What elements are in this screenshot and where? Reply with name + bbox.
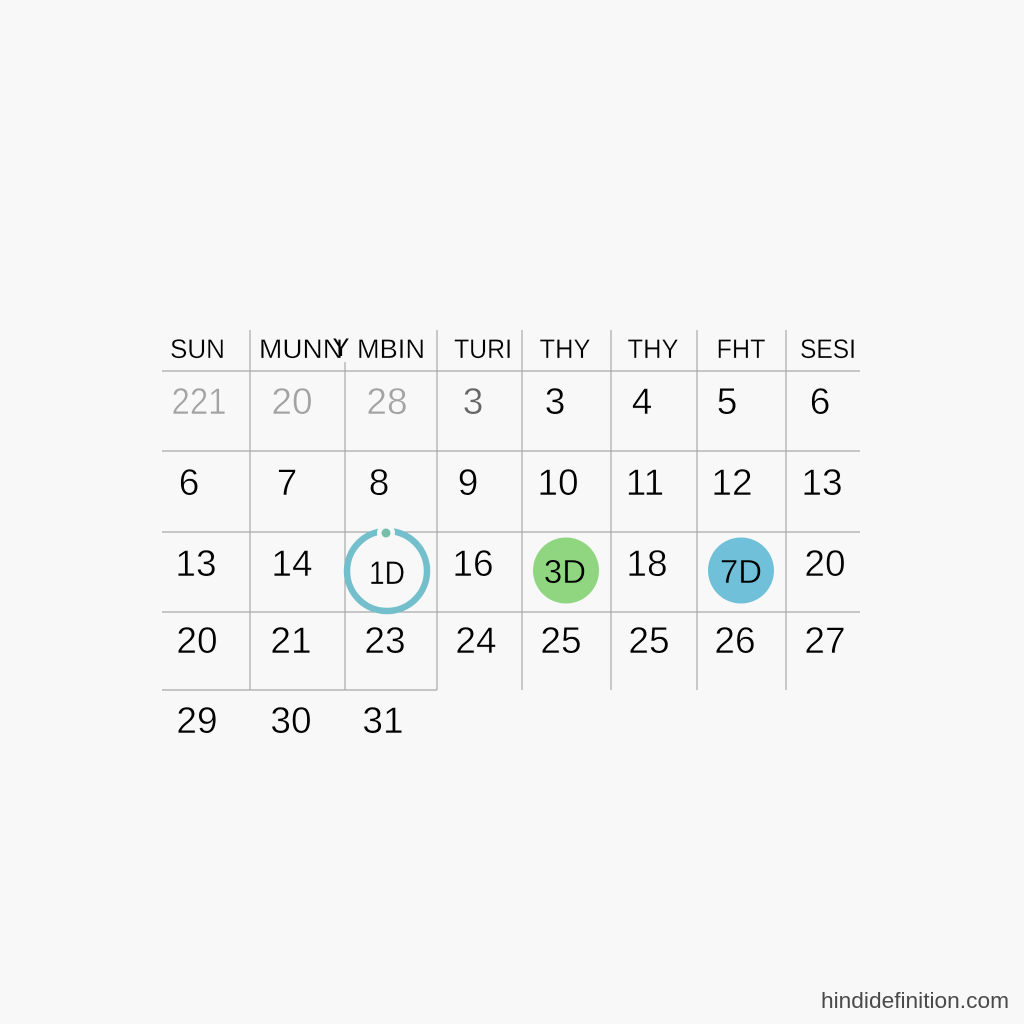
calendar week 1 dates: [172, 381, 830, 422]
1D ring marker: 1D: [369, 555, 405, 591]
calendar week 3 dates: 16: [452, 543, 494, 584]
calendar week 4 dates: 24: [455, 620, 497, 661]
calendar week 4 dates: 27: [804, 620, 846, 661]
7D blue marker: [708, 538, 774, 604]
calendar week 3 dates: 20: [804, 543, 846, 584]
weekday header row: [170, 334, 856, 364]
weekday header row: FHT: [716, 334, 766, 364]
weekday header row: SUN: [170, 334, 225, 364]
calendar week 3 dates: 14: [271, 543, 313, 584]
7D blue marker: 7D: [720, 553, 762, 590]
calendar week 1 dates: 28: [366, 381, 408, 422]
calendar week 3 dates: 18: [626, 543, 668, 584]
calendar week 2 dates: 6: [179, 462, 199, 503]
calendar week 1 dates: 6: [810, 381, 830, 422]
calendar week 2 dates: 11: [626, 462, 664, 503]
calendar week 2 dates: [179, 462, 843, 503]
calendar week 4 dates: 20: [176, 620, 218, 661]
weekday header row: THY: [540, 334, 590, 364]
weekday header row: THY: [628, 334, 678, 364]
weekday header row: Y: [333, 334, 350, 362]
calendar week 2 dates: 8: [369, 462, 389, 503]
calendar week 5 dates: 29: [176, 700, 218, 741]
calendar week 2 dates: 7: [277, 462, 297, 503]
calendar week 2 dates: 9: [458, 462, 478, 503]
calendar week 4 dates: 25: [628, 620, 670, 661]
calendar week 3 dates: [175, 543, 846, 584]
weekday header row: MUNN: [259, 334, 343, 364]
calendar week 2 dates: 13: [801, 462, 843, 503]
calendar week 1 dates: 4: [632, 381, 652, 422]
calendar week 1 dates: 20: [271, 381, 313, 422]
calendar week 4 dates: 23: [364, 620, 406, 661]
calendar week 4 dates: [176, 620, 846, 661]
weekday header row: TURI: [454, 334, 512, 364]
calendar week 2 dates: 10: [537, 462, 579, 503]
calendar week 1 dates: 5: [717, 381, 737, 422]
calendar week 4 dates: 21: [270, 620, 312, 661]
weekday header row: SESI: [800, 334, 856, 364]
watermark: hindidefinition.com: [821, 988, 1009, 1013]
calendar week 4 dates: 26: [714, 620, 756, 661]
3D green marker: [533, 538, 599, 604]
calendar week 1 dates: 221: [172, 381, 226, 422]
calendar week 5 dates: 30: [270, 700, 312, 741]
3D green marker: 3D: [544, 553, 586, 590]
calendar week 5 dates: 31: [362, 700, 404, 741]
calendar week 5 dates: [176, 700, 404, 741]
calendar week 4 dates: 25: [540, 620, 582, 661]
calendar week 1 dates: 3: [545, 381, 565, 422]
calendar week 2 dates: 12: [711, 462, 753, 503]
weekday header row: MBIN: [357, 334, 425, 364]
calendar week 1 dates: 3: [463, 381, 483, 422]
1D ring marker: [347, 524, 427, 611]
calendar week 3 dates: 13: [175, 543, 217, 584]
